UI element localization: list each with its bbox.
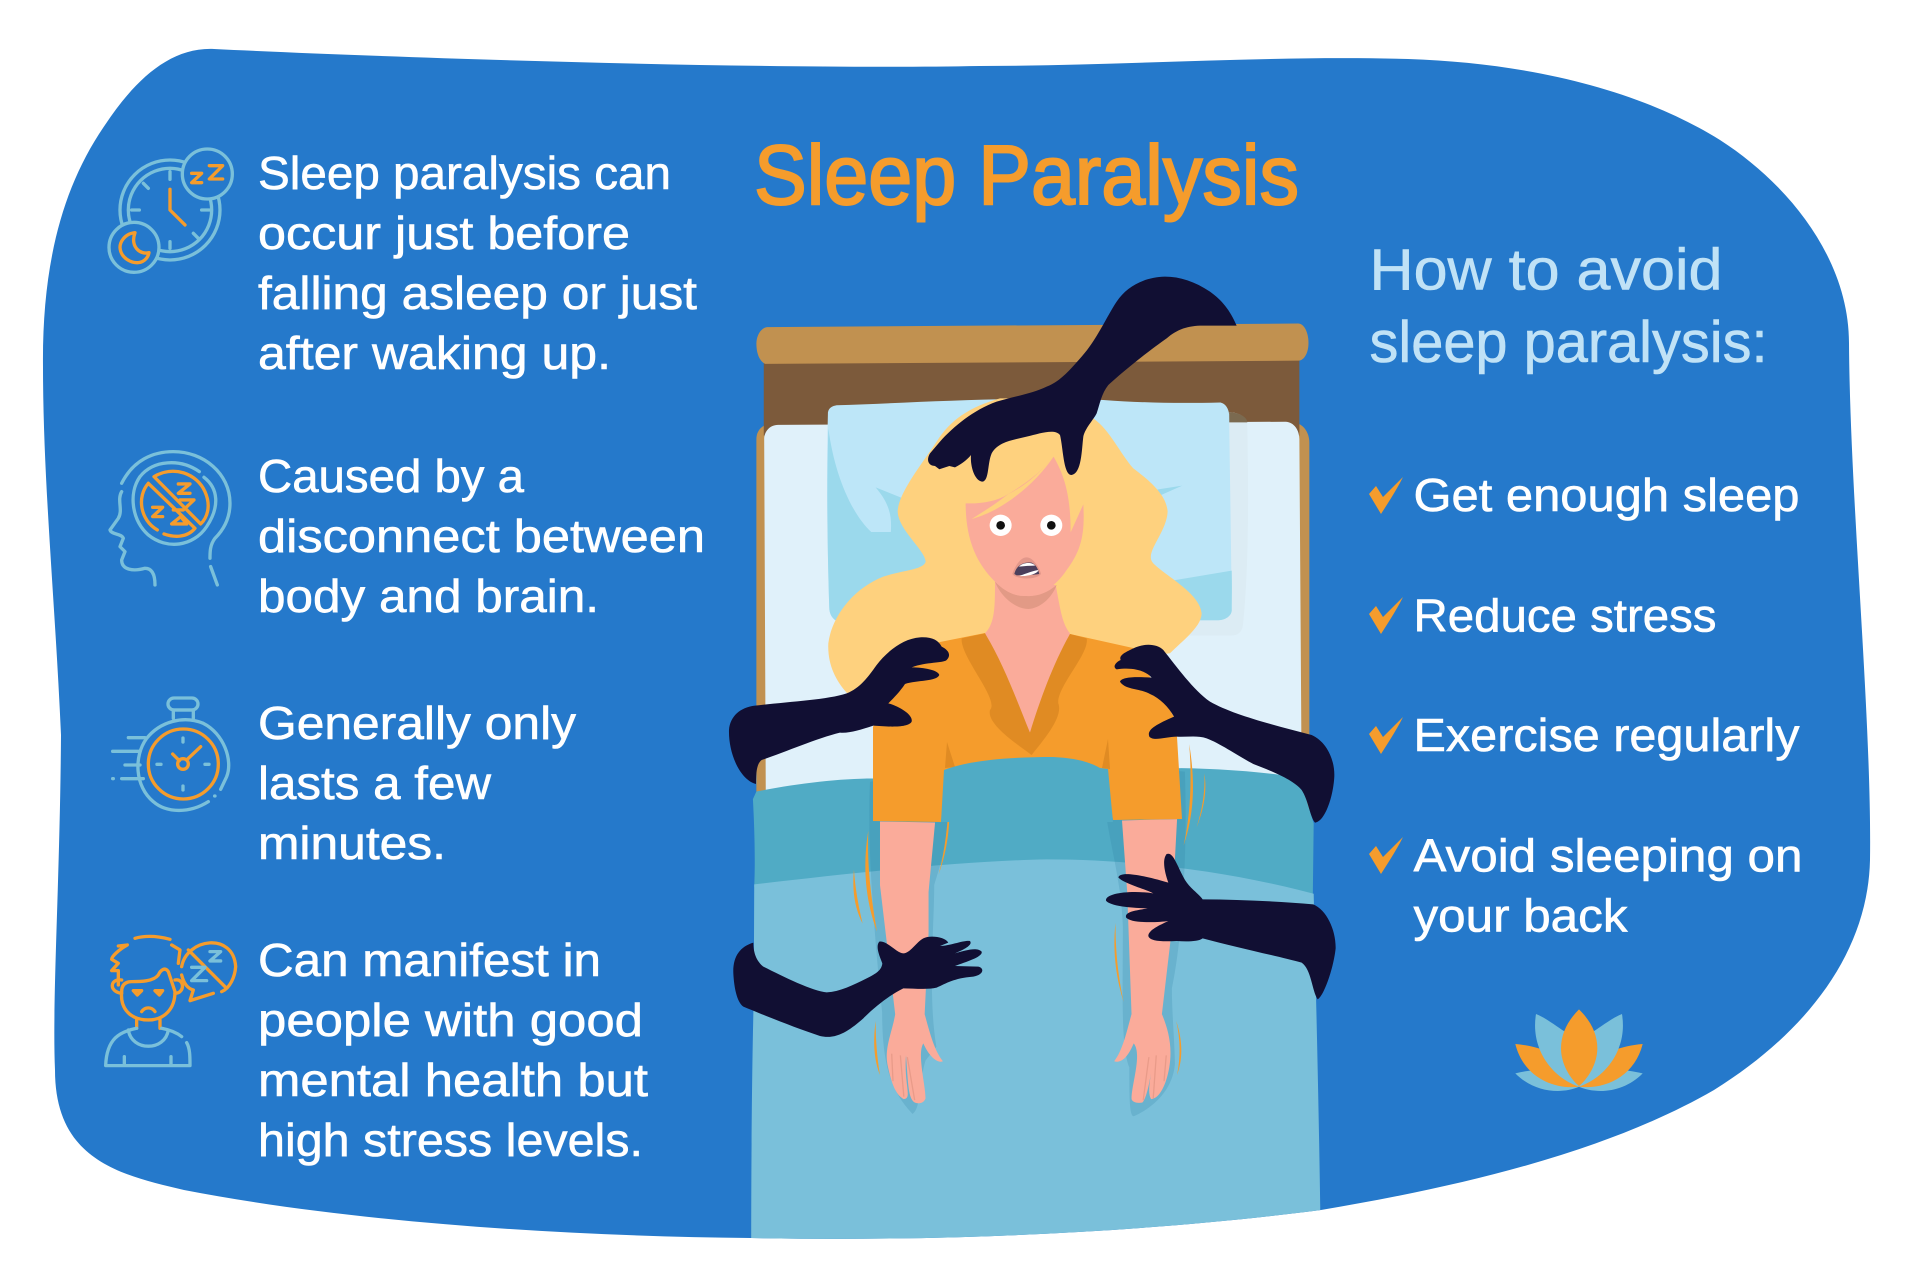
neck — [985, 582, 1070, 735]
hand: right forearm — [1106, 854, 1336, 999]
mattress — [764, 422, 1302, 828]
text block: cause: body and brain. — [258, 570, 599, 622]
heading: how to avoid: sleep paralysis: — [1370, 310, 1768, 375]
text block: who is affected: high stress levels. — [258, 1114, 643, 1166]
icon: check 2 — [1369, 597, 1403, 634]
icon: check 1 — [1369, 477, 1403, 514]
text block: who is affected: people with good — [258, 994, 643, 1046]
arms — [869, 765, 1186, 1116]
list item: reduce stress: Reduce stress — [1414, 590, 1716, 642]
list item: sleeping position — [1414, 830, 1802, 942]
pajama shirt — [873, 633, 1182, 822]
title: Sleep Paralysis — [754, 128, 1299, 222]
icon: stopwatch — [113, 698, 229, 810]
text block: timing: Sleep paralysis can — [258, 147, 671, 199]
hair — [828, 398, 1202, 693]
hand: reaching over headboard — [928, 277, 1237, 482]
hand: right shoulder — [1115, 645, 1334, 823]
text block: who is affected: Can manifest in — [258, 934, 601, 986]
icon: clock with moon and zzz — [109, 149, 232, 272]
list item: exercise: Exercise regularly — [1414, 709, 1800, 761]
blanket — [751, 768, 1321, 1270]
text block: cause — [258, 450, 705, 622]
bed frame — [756, 324, 1309, 828]
list item: sleeping position: Avoid sleeping on — [1414, 830, 1802, 882]
face — [966, 457, 1084, 596]
icon: check 4 — [1369, 837, 1403, 874]
blanket fold over shirt — [941, 757, 1113, 822]
text block: cause: Caused by a — [258, 450, 524, 502]
pillow — [827, 399, 1248, 636]
text block: duration: Generally only — [258, 697, 576, 749]
icon: head with crossed sleep — [110, 452, 230, 585]
text block: who is affected — [258, 934, 648, 1166]
text block: duration — [258, 697, 576, 869]
text block: timing — [258, 147, 697, 379]
text block: cause: disconnect between — [258, 510, 705, 562]
hand: left wrist — [733, 937, 982, 1037]
icon: tired person with crossed sleep bubble — [106, 936, 236, 1066]
text block: timing: falling asleep or just — [258, 267, 697, 319]
text block: timing: occur just before — [258, 207, 630, 259]
list item: enough sleep: Get enough sleep — [1414, 469, 1800, 521]
icon: lotus — [1515, 1009, 1643, 1091]
tremor lines — [853, 744, 1205, 1075]
text block: duration: lasts a few — [258, 757, 492, 809]
text block: timing: after waking up. — [258, 327, 611, 379]
text block: duration: minutes. — [258, 817, 446, 869]
heading: how to avoid: How to avoid — [1370, 238, 1722, 302]
list item: sleeping position: your back — [1414, 890, 1629, 942]
heading: how to avoid — [1370, 238, 1768, 375]
hand: left shoulder — [729, 637, 949, 784]
illustration: bed and person — [729, 277, 1336, 1270]
text block: who is affected: mental health but — [258, 1054, 648, 1106]
icon: check 3 — [1369, 717, 1403, 754]
